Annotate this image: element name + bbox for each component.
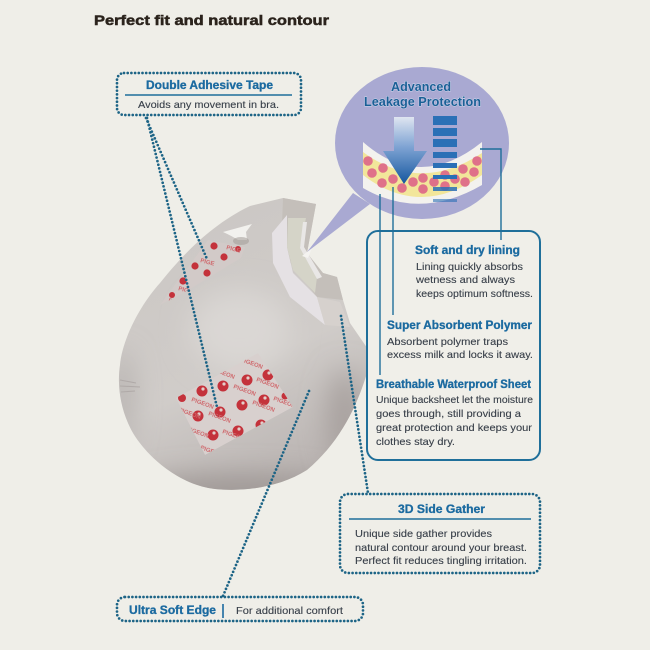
lower adhesive tape: PIGEON	[207, 411, 231, 425]
white strip	[300, 222, 322, 279]
panel: ultra soft edge: Ultra Soft Edge	[129, 605, 216, 617]
gather tab	[317, 297, 350, 327]
dotted pointer to side gather	[341, 316, 368, 493]
panel: ultra soft edge	[117, 597, 363, 621]
white lining	[272, 215, 325, 325]
upper adhesive tape: PIGE	[225, 245, 241, 255]
breathable waterproof sheet text: great protection and keeps your	[376, 422, 533, 434]
absorbent core	[287, 218, 317, 293]
lower adhesive tape: PIGEON	[211, 367, 235, 381]
panel: double adhesive tape	[117, 73, 301, 115]
icon: vapour stripes	[433, 116, 457, 202]
breathable waterproof sheet text: clothes stay dry.	[376, 436, 455, 448]
breathable waterproof sheet text	[376, 379, 533, 448]
lower adhesive tape: PIGEON	[190, 397, 214, 411]
callout: advanced leakage protection bubble	[307, 67, 509, 252]
lower adhesive tape: PIGEON	[232, 384, 256, 398]
lower adhesive tape: PIGEON	[239, 357, 263, 371]
breathable waterproof sheet text: Unique backsheet let the moisture	[376, 394, 533, 406]
super absorbent polymer text: Super Absorbent Polymer	[387, 320, 533, 332]
dotted pointer to soft edge	[223, 391, 309, 596]
panel: double adhesive tape: Double Adhesive Tape	[146, 80, 273, 92]
lower adhesive tape: PIGEON	[255, 377, 279, 391]
super absorbent polymer text: Absorbent polymer traps	[387, 336, 508, 348]
soft and dry lining text: keeps optimum softness.	[416, 288, 533, 300]
panel: 3D side gather: Perfect fit reduces tingling irritation.	[355, 555, 527, 567]
lower adhesive tape: PIGEON	[272, 396, 296, 410]
panel: 3D side gather: 3D Side Gather	[398, 504, 486, 516]
dotted pointers to adhesive tape	[146, 118, 217, 407]
title: Perfect fit and natural contour	[94, 12, 330, 28]
super absorbent polymer text: excess milk and locks it away.	[387, 349, 533, 361]
soft and dry lining text: Lining quickly absorbs	[416, 261, 523, 273]
panel: 3D side gather	[340, 494, 540, 573]
panel: 3D side gather: natural contour around your breast.	[355, 542, 527, 554]
lower adhesive tape: PIGEON	[251, 400, 275, 414]
bubble heading: Leakage Protection	[364, 94, 481, 109]
upper adhesive tape: PIGE	[167, 298, 183, 308]
leader lines from bubble to descriptions	[380, 149, 501, 375]
panel: ultra soft edge: For additional comfort	[236, 605, 343, 617]
bubble heading: Advanced	[391, 79, 451, 94]
bubble heading	[364, 79, 481, 109]
upper adhesive tape	[168, 242, 241, 301]
soft and dry lining text: wetness and always	[415, 274, 515, 286]
icon: moisture arrow	[383, 117, 427, 184]
cross-section layers	[363, 142, 482, 204]
lower adhesive tape: PIGEON	[177, 407, 201, 421]
panel: layer descriptions	[367, 231, 540, 460]
soft and dry lining text: Soft and dry lining	[415, 245, 520, 257]
panel: double adhesive tape: Avoids any movement in bra.	[138, 99, 279, 111]
breathable waterproof sheet text: goes through, still providing a	[376, 408, 521, 420]
upper adhesive tape: PIGE	[199, 258, 215, 268]
super absorbent polymer text	[387, 320, 533, 361]
lower adhesive tape: PIGEON	[185, 426, 209, 440]
lower adhesive tape: PIGEON	[221, 429, 245, 443]
side gather	[282, 198, 343, 300]
neck notch	[302, 248, 312, 258]
upper adhesive tape: PIGE	[177, 286, 193, 296]
lower adhesive tape	[177, 360, 292, 455]
breathable waterproof sheet text: Breathable Waterproof Sheet	[376, 379, 531, 391]
soft and dry lining text	[415, 245, 533, 300]
nursing pad illustration	[114, 198, 372, 508]
panel: 3D side gather: Unique side gather provides	[355, 528, 492, 540]
lower adhesive tape: PIGEON	[199, 445, 223, 459]
hole	[223, 224, 252, 240]
